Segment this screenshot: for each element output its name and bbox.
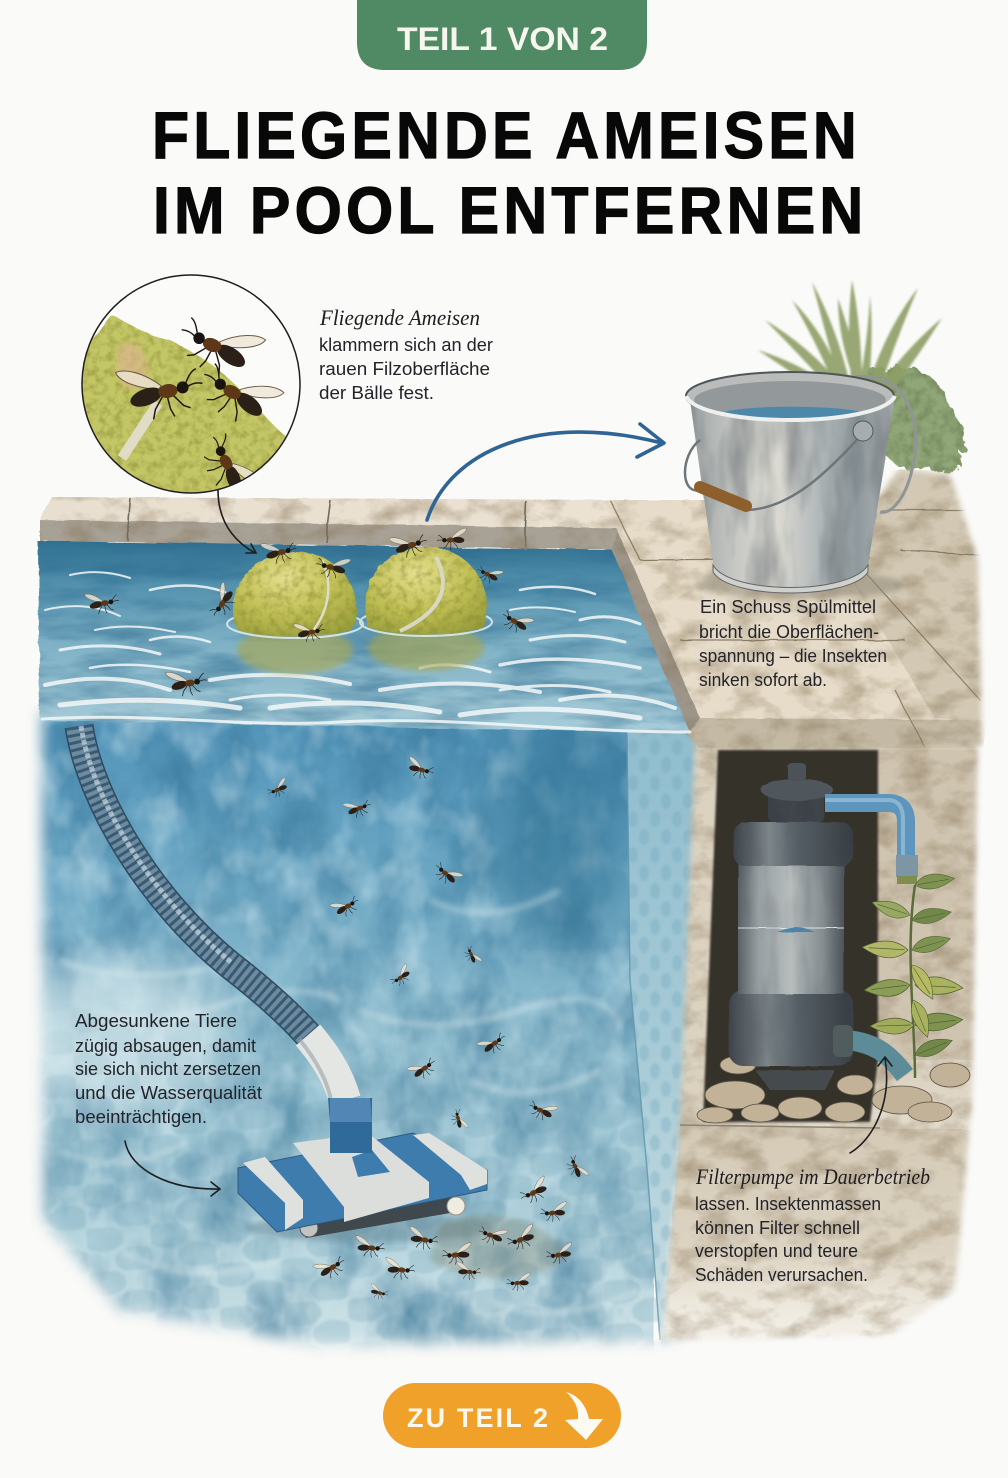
arrow: lens to balls [218,490,256,553]
button: to part 2 [383,1383,621,1448]
callout: filter pump: lassen. Insektenmassen [695,1194,881,1214]
button: to part 2: ZU TEIL 2 [407,1403,548,1433]
arrow: balls to bucket [427,424,664,520]
title [152,100,863,248]
arrow: callout to pump [850,1057,892,1153]
light caustics on floor [60,890,640,1313]
right coping with bucket platform [605,470,990,748]
badge: part 1 of 2 [357,0,647,70]
right ball [365,547,487,634]
tan stone wall and pump niche [650,735,990,1355]
ball ripples [227,608,492,638]
bucket shadow [695,571,905,599]
floating balls [227,547,492,674]
callout: dish soap: Ein Schuss Spülmittel [700,597,876,617]
bush [866,366,965,472]
title: FLIEGENDE AMEISEN [152,100,857,173]
plant behind bucket [758,280,965,472]
back handle [855,376,916,512]
callout: flying ants: der Bälle fest. [319,383,434,403]
left ball [233,552,357,636]
callout: flying ants: klammern sich an der [319,335,493,355]
callout: sunken ants: beeinträchtigen. [75,1107,207,1127]
callout: dish soap: spannung – die Insekten [699,646,887,666]
hose [79,726,345,1100]
callout: flying ants [319,305,493,403]
arrow: callout to vacuum [125,1141,220,1196]
water surface [38,541,690,732]
back wall and floor [24,705,654,1370]
plant beside pump [861,871,964,1078]
ant pile on pool floor [312,1176,576,1301]
callout: flying ants: Fliegende Ameisen [319,305,480,330]
magnifier lens [81,274,301,494]
pebbles [697,1056,970,1123]
sinking ants [266,756,589,1183]
callout: filter pump: können Filter schnell [695,1218,860,1238]
callout: dish soap: sinken sofort ab. [699,670,827,690]
callout: flying ants: rauen Filzoberfläche [319,359,490,379]
bucket body [690,400,895,588]
ball reflections [237,625,484,674]
callout: filter pump [695,1164,930,1285]
ripples [42,572,690,732]
icon: arrow down [565,1392,603,1440]
callout: sunken ants: sie sich nicht zersetzen [75,1059,261,1079]
rear coping stones [40,497,640,550]
callout: filter pump: verstopfen und teure [695,1241,858,1261]
callout: filter pump: Filterpumpe im Dauerbetrieb [695,1164,930,1189]
bucket [685,372,916,599]
callout: filter pump: Schäden verursachen. [695,1265,868,1285]
tank [729,763,853,1090]
surface ants [84,528,535,697]
callout: dish soap: bricht die Oberflächen- [699,622,879,642]
side wall [627,712,730,1360]
lower pipe [833,1025,905,1075]
pump niche [703,750,878,1122]
title: IM POOL ENTFERNEN [153,175,863,248]
spiky leaves [758,280,942,400]
callout: dish soap [699,597,887,690]
callout: sunken ants [75,1011,262,1127]
badge: part 1 of 2: TEIL 1 VON 2 [397,21,608,57]
dark corner shading [490,700,630,960]
underwater pool and walls [10,700,730,1370]
callout: sunken ants: und die Wasserqualität [75,1083,262,1103]
filter pump [697,763,970,1123]
bucket handle [685,432,864,510]
pool vacuum head [238,1098,495,1242]
callout: sunken ants: zügig absaugen, damit [75,1036,256,1056]
light lower-left glow [10,960,230,1120]
outlet pipe [825,800,918,884]
callout: sunken ants: Abgesunkene Tiere [75,1011,237,1031]
